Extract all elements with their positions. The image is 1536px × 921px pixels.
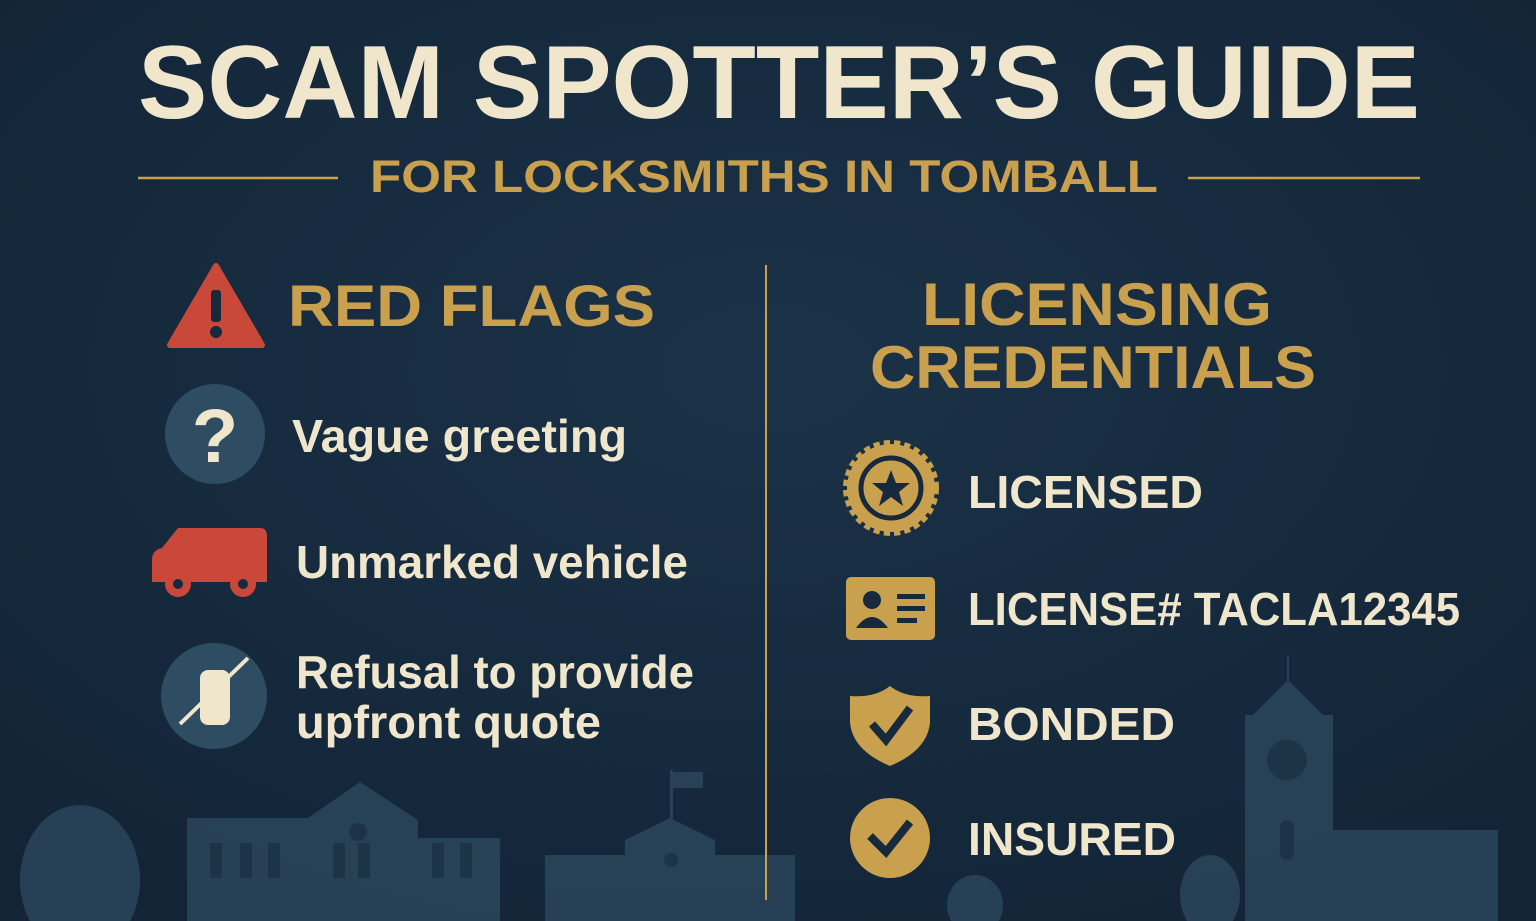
divider [765, 265, 767, 900]
panel: licensing credentials [846, 271, 1460, 878]
icon: van [152, 528, 267, 597]
icon: question: ? [192, 394, 238, 479]
icon: warning [170, 266, 262, 345]
text: refusal: Refusal to provide [296, 646, 694, 698]
icon: id card [846, 577, 935, 640]
panel: red flags [152, 266, 694, 749]
icon: question [165, 384, 265, 484]
icon: check circle [850, 798, 930, 878]
text: vague greeting: Vague greeting [292, 410, 627, 462]
title: SCAM SPOTTER’S GUIDE [138, 25, 1420, 141]
icon: badge [847, 444, 935, 532]
text: insured: INSURED [968, 813, 1176, 865]
text: unmarked vehicle: Unmarked vehicle [296, 536, 688, 588]
heading: red flags: RED FLAGS [288, 274, 655, 339]
heading: licensing credentials: LICENSING [922, 271, 1272, 338]
heading: licensing credentials [870, 271, 1316, 401]
text: refusal [296, 646, 694, 748]
text: refusal: upfront quote [296, 696, 601, 748]
heading: licensing credentials: CREDENTIALS [870, 334, 1316, 401]
subtitle: FOR LOCKSMITHS IN TOMBALL [370, 151, 1158, 202]
text: bonded: BONDED [968, 698, 1175, 750]
icon: no quote [161, 643, 267, 749]
text: license number: LICENSE# TACLA12345 [968, 583, 1460, 635]
text: licensed: LICENSED [968, 466, 1203, 518]
skyline background [20, 655, 1498, 921]
icon: shield [850, 686, 930, 766]
